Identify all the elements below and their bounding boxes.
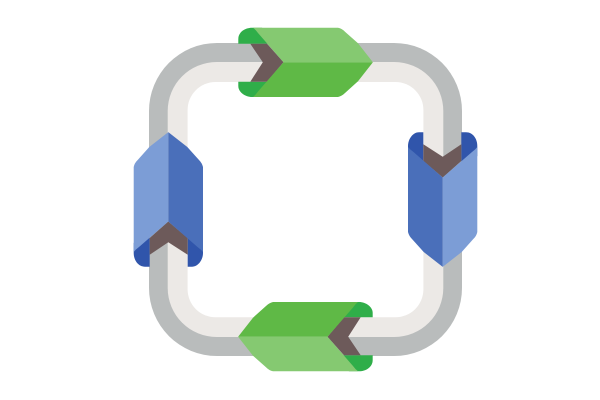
- rounded square ring: [149, 43, 462, 356]
- arrow: left blue: [134, 132, 203, 267]
- arrow: bottom green: [238, 302, 373, 371]
- arrow: top green: [238, 28, 373, 97]
- arrow: right blue: [408, 132, 477, 267]
